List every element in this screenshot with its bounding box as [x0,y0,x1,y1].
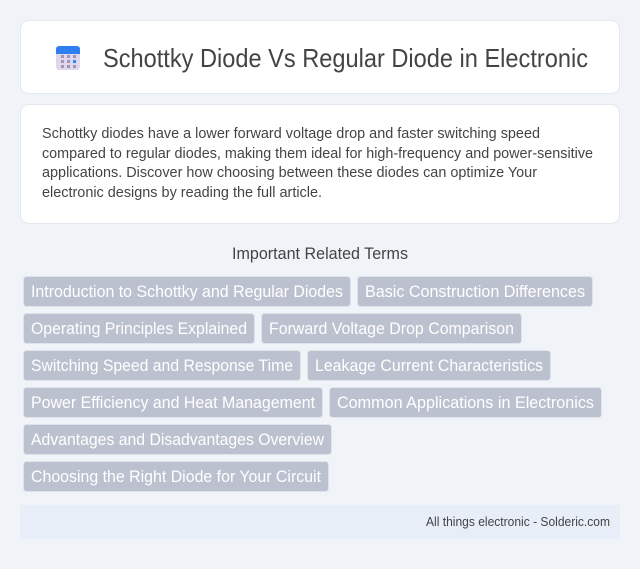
tag: Introduction to Schottky and Regular Diodes [31,282,343,301]
tag: Switching Speed and Response Time [31,356,293,375]
heading: related terms: Important Related Terms [232,245,408,263]
tag [262,314,522,344]
tag: Common Applications in Electronics [337,393,594,412]
tag [308,350,550,380]
tag: Advantages and Disadvantages Overview [31,430,325,449]
footer [20,505,620,539]
tag [24,462,328,492]
tag [24,350,300,380]
tag [358,276,592,306]
tag [330,388,602,418]
title: Schottky Diode Vs Regular Diode in Electronic [103,43,588,73]
tag [24,314,254,344]
summary text: electronic designs by reading the full article. [42,184,322,201]
tag: Operating Principles Explained [31,319,247,338]
footer text: All things electronic - Solderic.com [426,515,610,529]
tag: Basic Construction Differences [365,282,585,301]
tag: Choosing the Right Diode for Your Circuit [31,467,321,486]
tag: Leakage Current Characteristics [315,356,543,375]
tags: related terms [24,276,602,492]
summary text: compared to regular diodes, making them ideal for high-frequency and power-sensitive [42,145,593,162]
summary text [42,125,593,201]
icon: calendar [56,46,80,70]
tag [24,388,322,418]
tag: Power Efficiency and Heat Management [31,393,315,412]
summary text: applications. Discover how choosing between these diodes can optimize Your [42,164,537,181]
tag: Forward Voltage Drop Comparison [269,319,514,338]
summary text: Schottky diodes have a lower forward voltage drop and faster switching speed [42,125,540,142]
title card [20,20,620,94]
tag [24,276,350,306]
tag [24,424,332,454]
summary card [20,104,620,224]
